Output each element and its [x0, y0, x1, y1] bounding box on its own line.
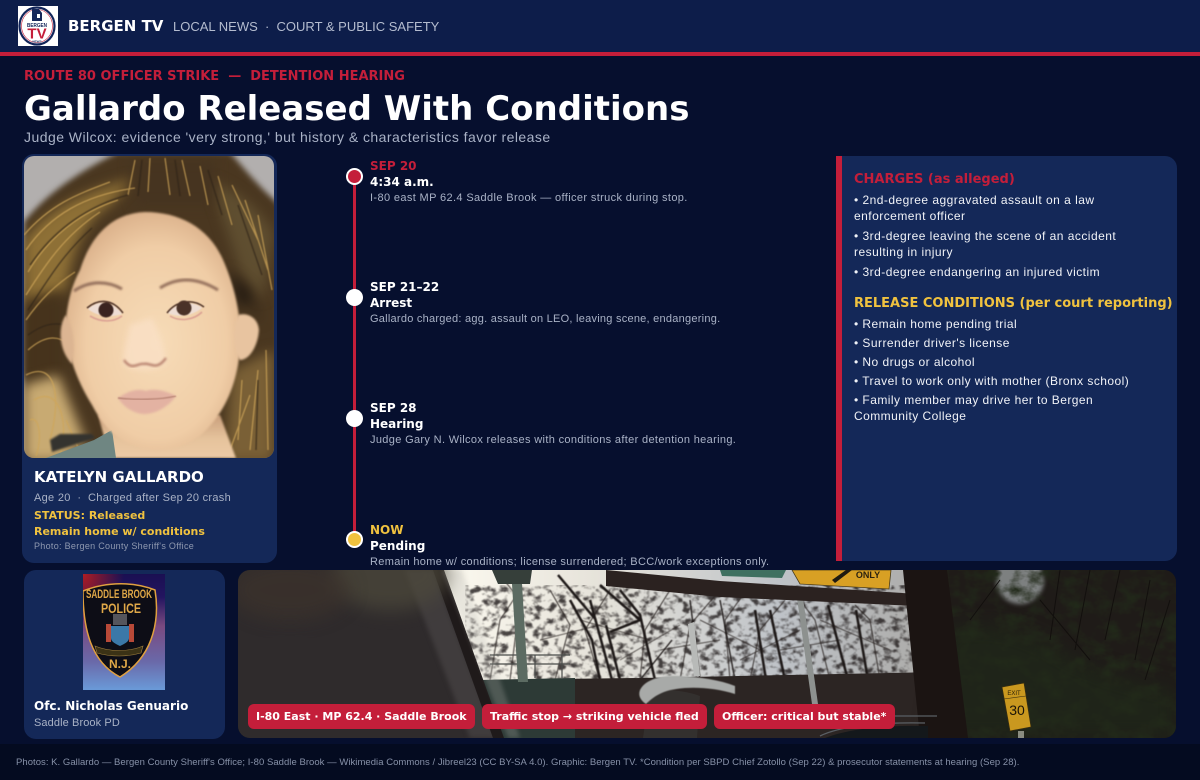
guardrail [490, 655, 570, 678]
photo: Katelyn Gallardo portrait [24, 156, 274, 458]
timeline [346, 159, 769, 568]
charges list: • 3rd-degree endangering an injured victim [854, 265, 1100, 279]
embankment [480, 672, 940, 738]
credits: Photos: K. Gallardo — Bergen County Sheriff's Office; I-80 Saddle Brook — Wikimedia Commons / Jibreel23 (CC BY-SA 4.0). Graphic: Bergen TV. *Condition per SBPD Chief Zotollo (Sep 22) & prosecutor statements at hearing (Sep 28). [16, 757, 1019, 768]
event: Now: NOW [370, 523, 403, 537]
conditions list: Community College [854, 409, 966, 423]
charges list: • 2nd-degree aggravated assault on a law [854, 193, 1094, 207]
ear left [61, 315, 74, 364]
eyebrow: ROUTE 80 OFFICER STRIKE — DETENTION HEARING [24, 69, 405, 84]
event: Sep 21-22 [346, 280, 720, 325]
section label: LOCAL NEWS · COURT & PUBLIC SAFETY [173, 19, 439, 34]
icon: Saddle Brook Police badge: POLICE [101, 600, 141, 616]
guard and mesh [643, 688, 700, 738]
conditions list [854, 317, 1129, 423]
left pillar [238, 570, 498, 738]
conditions list: • Travel to work only with mother (Bronx school) [854, 374, 1129, 388]
panel: officer card [24, 570, 225, 739]
utility pole [903, 570, 968, 738]
officer department: Saddle Brook PD [34, 717, 120, 729]
eyes [87, 300, 204, 321]
hair mass [24, 152, 280, 462]
event: Sep 20: SEP 20 [370, 159, 417, 173]
officer name: Ofc. Nicholas Genuario [34, 699, 188, 713]
green sign [720, 570, 786, 578]
conditions list: • Surrender driver's license [854, 336, 1010, 350]
icon: Bergen TV logo: BERGEN [27, 23, 47, 29]
nose [123, 318, 166, 370]
icon: Bergen TV logo: NEWS [32, 40, 42, 44]
icon: Saddle Brook Police badge [83, 574, 165, 690]
photo credit: Photo: Bergen County Sheriff's Office [34, 541, 194, 551]
event: Sep 28 [346, 401, 736, 446]
conditions list: • No drugs or alcohol [854, 355, 975, 369]
icon: Bergen TV logo [18, 6, 58, 46]
title: Gallardo Released With Conditions [24, 89, 689, 129]
event: Sep 21-22: SEP 21–22 [370, 280, 439, 294]
dark trunks [558, 575, 868, 680]
charges list: resulting in injury [854, 245, 953, 259]
event: Now: Pending [370, 539, 425, 553]
sky [440, 570, 960, 682]
overhead beam [606, 570, 917, 606]
subtitle: Judge Wilcox: evidence 'very strong,' but history & characteristics favor release [24, 129, 551, 145]
officer condition pill: Officer: critical but stable* [722, 710, 886, 723]
location pill: I-80 East · MP 62.4 · Saddle Brook [256, 710, 467, 723]
event: Sep 21-22: Arrest [370, 296, 412, 310]
vegetation [925, 570, 1176, 738]
icon: Saddle Brook Police badge: N.J. [109, 657, 131, 671]
stop pill: Traffic stop → striking vehicle fled [490, 710, 699, 723]
pale pole [688, 622, 700, 676]
event: Sep 20: 4:34 a.m. [370, 175, 434, 189]
exit sign: EXIT [1007, 691, 1021, 697]
brows [74, 280, 218, 291]
event: Sep 21-22: Gallardo charged: agg. assault on LEO, leaving scene, endangering. [370, 313, 720, 325]
footer [0, 744, 1200, 780]
charges list [854, 193, 1116, 279]
panel: defendant card [22, 154, 277, 563]
event: Sep 28: Hearing [370, 417, 423, 431]
event: Sep 28: SEP 28 [370, 401, 417, 415]
name: KATELYN GALLARDO [34, 468, 204, 486]
details: Age 20 · Charged after Sep 20 crash [34, 492, 231, 504]
conditions list: • Remain home pending trial [854, 317, 1017, 331]
location pill [248, 704, 475, 729]
yellow sign [792, 570, 891, 589]
conditions list: • Family member may drive her to Bergen [854, 393, 1093, 407]
vehicle outline [820, 716, 937, 736]
event: Sep 20: I-80 east MP 62.4 Saddle Brook — officer struck during stop. [370, 192, 688, 204]
panel: charges and conditions [836, 156, 1177, 561]
heading: release conditions: RELEASE CONDITIONS (per court reporting) [854, 296, 1173, 311]
ear right [234, 314, 259, 360]
neck [98, 415, 236, 458]
panel: scene photo I-80 [238, 570, 1176, 738]
photo: highway roadside: ONLY [856, 570, 880, 580]
face [66, 212, 240, 450]
event: Now: Remain home w/ conditions; license surrendered; BCC/work exceptions only. [370, 556, 769, 568]
brand name: BERGEN TV [68, 17, 163, 35]
charges list: • 3rd-degree leaving the scene of an accident [854, 229, 1116, 243]
event: Now [346, 523, 769, 568]
photo: highway roadside [238, 570, 1176, 738]
conditions summary: Remain home w/ conditions [34, 525, 205, 538]
shirt [46, 430, 116, 458]
timeline spine [353, 176, 356, 540]
twig texture [465, 585, 955, 682]
heading: charges: CHARGES (as alleged) [854, 172, 1015, 187]
event: Sep 28: Judge Gary N. Wilcox releases with conditions after detention hearing. [370, 434, 736, 446]
exit sign [1002, 683, 1031, 738]
header bar [0, 0, 1200, 56]
light pole [512, 584, 528, 682]
lips [118, 390, 176, 414]
icon: Bergen TV logo: TV [27, 26, 47, 42]
event: Sep 20 [346, 159, 688, 204]
charges list: enforcement officer [854, 209, 965, 223]
officer condition pill [714, 704, 895, 729]
exit sign: 30 [1009, 702, 1025, 718]
stop pill [482, 704, 707, 729]
status: STATUS: Released [34, 509, 145, 522]
